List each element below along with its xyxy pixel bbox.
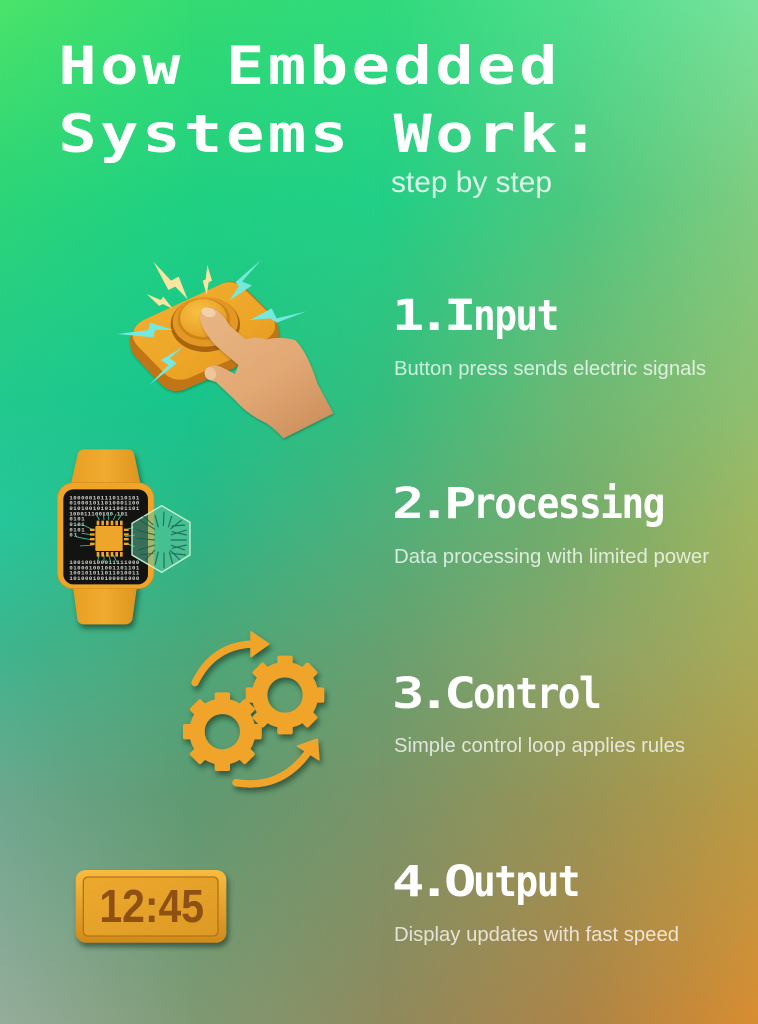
step 2 description: Data processing with limited power [394, 546, 709, 568]
step 2 heading: 2.P [392, 479, 470, 529]
binary text: 010001011010001100 [69, 500, 140, 507]
step 4: output [392, 857, 679, 946]
step 4 description: Display updates with fast speed [394, 924, 679, 946]
watch strap [71, 449, 141, 624]
clock body [76, 870, 226, 943]
binary text: 010001001001101101 [69, 564, 140, 571]
subtitle: step by step [391, 166, 552, 199]
step 1 heading: 1.I [392, 291, 470, 341]
upper arrow [195, 632, 269, 683]
binary text [69, 494, 140, 582]
binary text: 100000101110110101 [69, 494, 140, 501]
step 1 heading: nput [473, 291, 557, 341]
binary text: 0101 [69, 521, 85, 528]
binary text: 100101011011010011 [69, 570, 140, 577]
binary text: 101000100100001000 [69, 575, 140, 582]
lower gear [183, 692, 262, 771]
binary text: 100100100011111000 [69, 559, 140, 566]
button base [130, 282, 279, 391]
binary text: 010100101011001101 [69, 505, 140, 512]
step 2: processing [392, 479, 709, 568]
clock face [83, 877, 218, 936]
step 2 heading: rocessing [473, 479, 663, 529]
icon: digital clock display [76, 870, 226, 943]
binary text: 01 [69, 532, 78, 539]
upper gear [246, 656, 324, 734]
hand [200, 306, 333, 438]
binary text: 0101 [69, 526, 85, 533]
lower arrow [236, 739, 319, 784]
icon: smartwatch with chip [57, 449, 190, 624]
step 1 description: Button press sends electric signals [394, 358, 706, 380]
watch screen [63, 489, 148, 584]
title: How Embedded [58, 35, 561, 97]
step 4 heading: utput [473, 857, 579, 907]
chip with traces [76, 513, 135, 563]
step 4 heading [392, 857, 579, 907]
title [58, 35, 603, 165]
step 3 heading: 3.C [392, 669, 470, 719]
step 3 description: Simple control loop applies rules [394, 735, 685, 757]
round push button [171, 297, 240, 352]
step 4 heading: 4.O [392, 857, 470, 907]
step 1: input [392, 291, 706, 380]
clock digits: 12:45 [99, 880, 204, 932]
step 3 heading: ontrol [473, 669, 600, 719]
lightning bolts [117, 259, 307, 385]
step 3: control [392, 669, 685, 757]
step 3 heading [392, 669, 600, 719]
icon: gears and arrows [183, 632, 324, 784]
binary text: 0101 [69, 516, 85, 523]
binary text: 100011100100 101 [69, 510, 128, 517]
step 1 heading [392, 291, 557, 341]
title: Systems Work: [58, 103, 603, 165]
glass hexagon [132, 506, 190, 572]
icon: button press with hand [117, 259, 333, 438]
watch case [57, 483, 154, 589]
